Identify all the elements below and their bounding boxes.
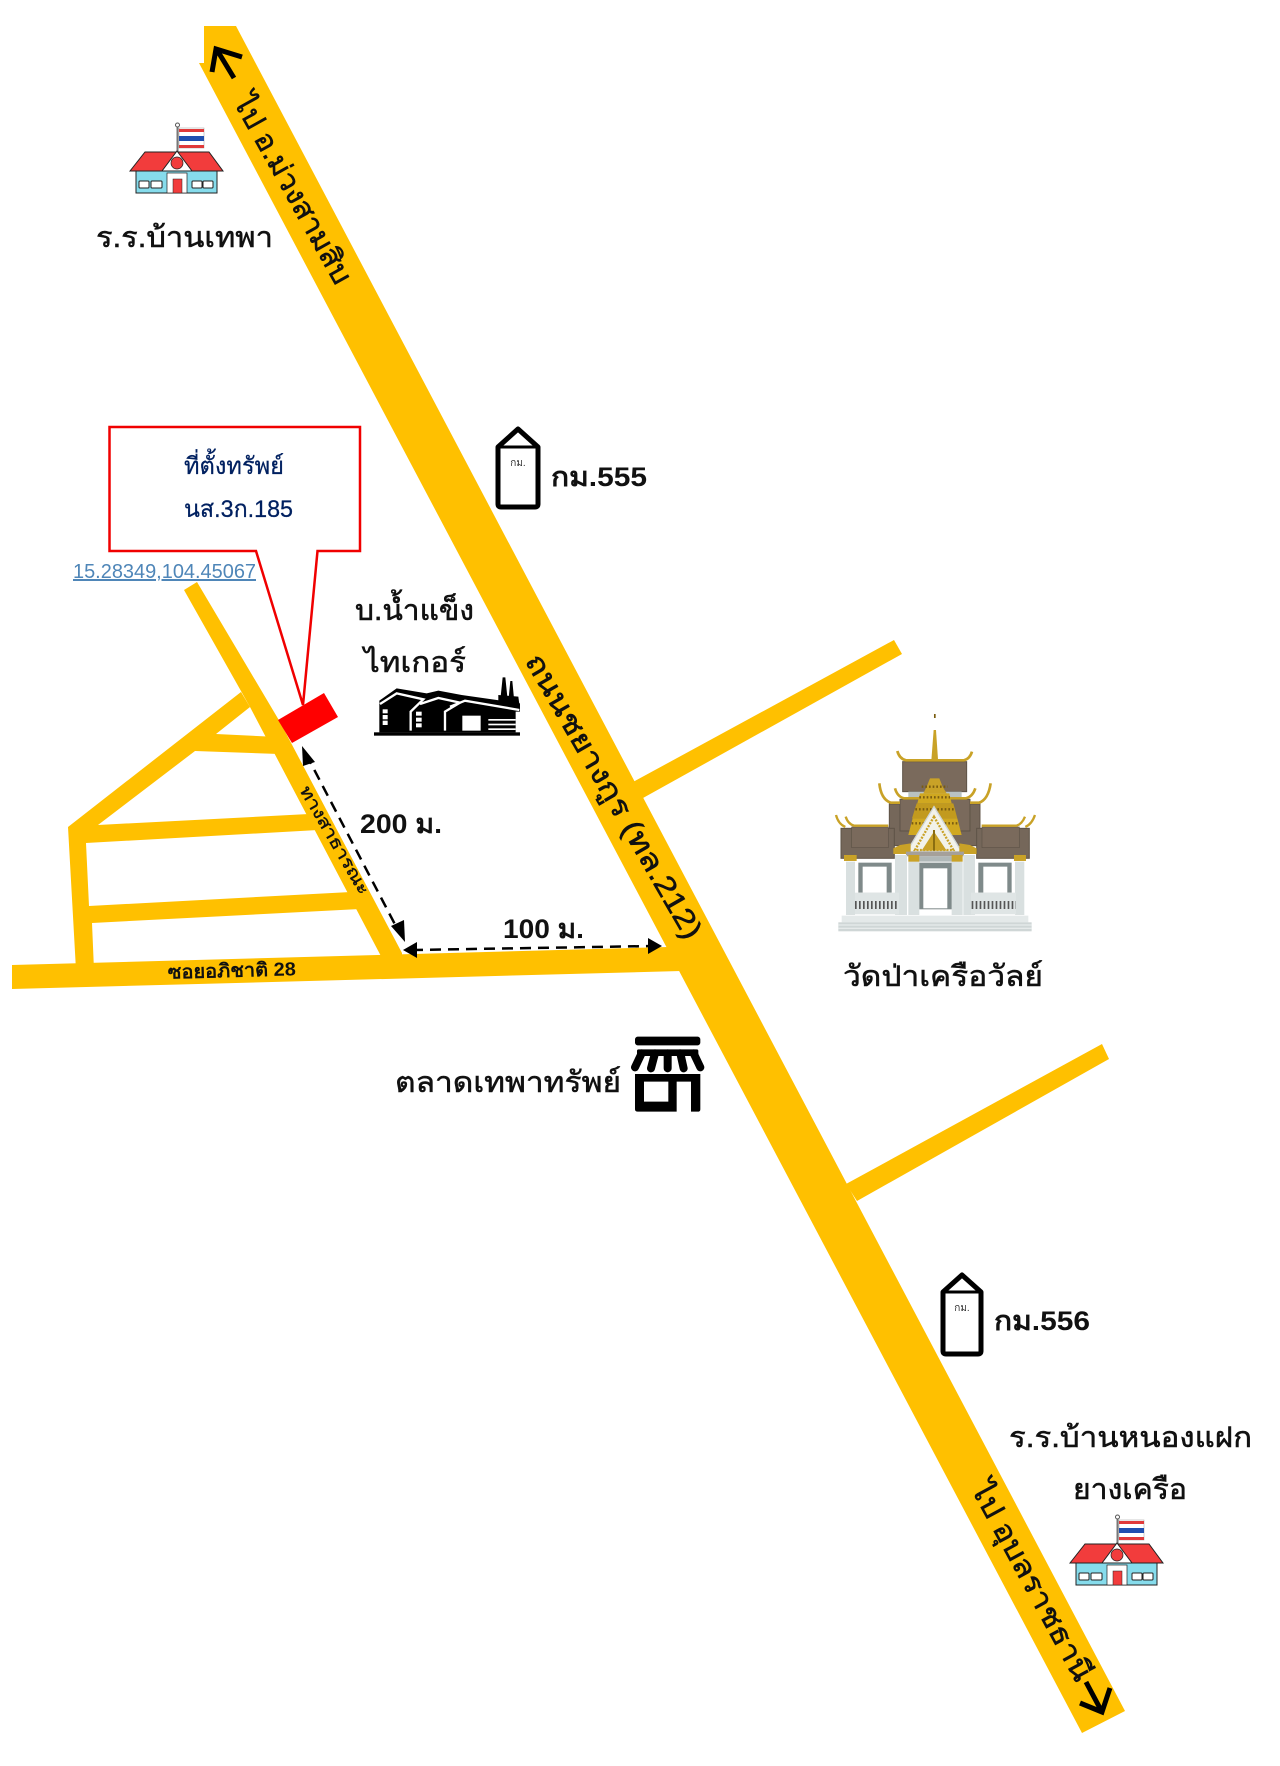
- label: temple: วัดป่าเครือวัลย์: [843, 960, 1043, 993]
- school icon: Nong Faek: [1070, 1515, 1163, 1585]
- public side road: [184, 582, 402, 970]
- road label: to Muang Sam Sip: ไป อ.ม่วงสามสิบ: [225, 86, 360, 290]
- label: Ban Thepha school: ร.ร.บ้านเทพา: [96, 222, 273, 254]
- label: market: ตลาดเทพาทรัพย์: [395, 1066, 621, 1099]
- distance arrow 200 m: [302, 746, 405, 942]
- distance label 100 m: 100 ม.: [503, 914, 584, 944]
- icon: factory: [374, 677, 520, 736]
- branch road 2: [846, 1044, 1109, 1201]
- callout: property location: นส.3ก.185: [184, 496, 293, 523]
- property marker: [278, 693, 338, 743]
- callout: property location: [110, 427, 360, 705]
- icon: temple: [836, 714, 1035, 931]
- label: Nong Faek school line 2: ยางเครือ: [1073, 1474, 1187, 1506]
- km marker 556: [943, 1275, 981, 1354]
- label: ice factory line 2: ไทเกอร์: [362, 645, 466, 679]
- label: ice factory line 1: บ.น้ำแข็ง: [355, 589, 474, 627]
- distance arrow 100 m: [403, 938, 662, 958]
- soi road: [12, 947, 681, 989]
- km label 555: กม.555: [551, 462, 647, 492]
- road label: to Ubon Ratchathani: ไป อุบลราชธานี: [962, 1473, 1100, 1687]
- distance label 200 m: 200 ม.: [360, 809, 442, 839]
- km marker 556: กม.: [954, 1303, 970, 1314]
- km label 556: กม.556: [994, 1306, 1090, 1336]
- branch road 1: [633, 640, 902, 798]
- side network: [68, 692, 360, 970]
- arrow: to Muang Sam Sip: [212, 49, 242, 78]
- km marker 555: กม.: [510, 458, 526, 469]
- school icon: Ban Thepha: [130, 123, 223, 193]
- road label: soi: ซอยอภิชาติ 28: [168, 959, 296, 984]
- main road: [199, 26, 1125, 1733]
- callout: property location: ที่ตั้งทรัพย์: [184, 448, 284, 480]
- km marker 555: [498, 429, 538, 507]
- coordinates link: 15.28349,104.45067: [73, 561, 256, 583]
- icon: market: [635, 1037, 700, 1112]
- road label: Chaiyangkun road: ถนนชยางกูร (ทล.212): [517, 648, 708, 945]
- arrow: to Ubon Ratchathani: [1080, 1682, 1110, 1712]
- road label: public way: ทางสาธารณะ: [296, 783, 373, 898]
- label: Nong Faek school line 1: ร.ร.บ้านหนองแฝก: [1009, 1422, 1252, 1454]
